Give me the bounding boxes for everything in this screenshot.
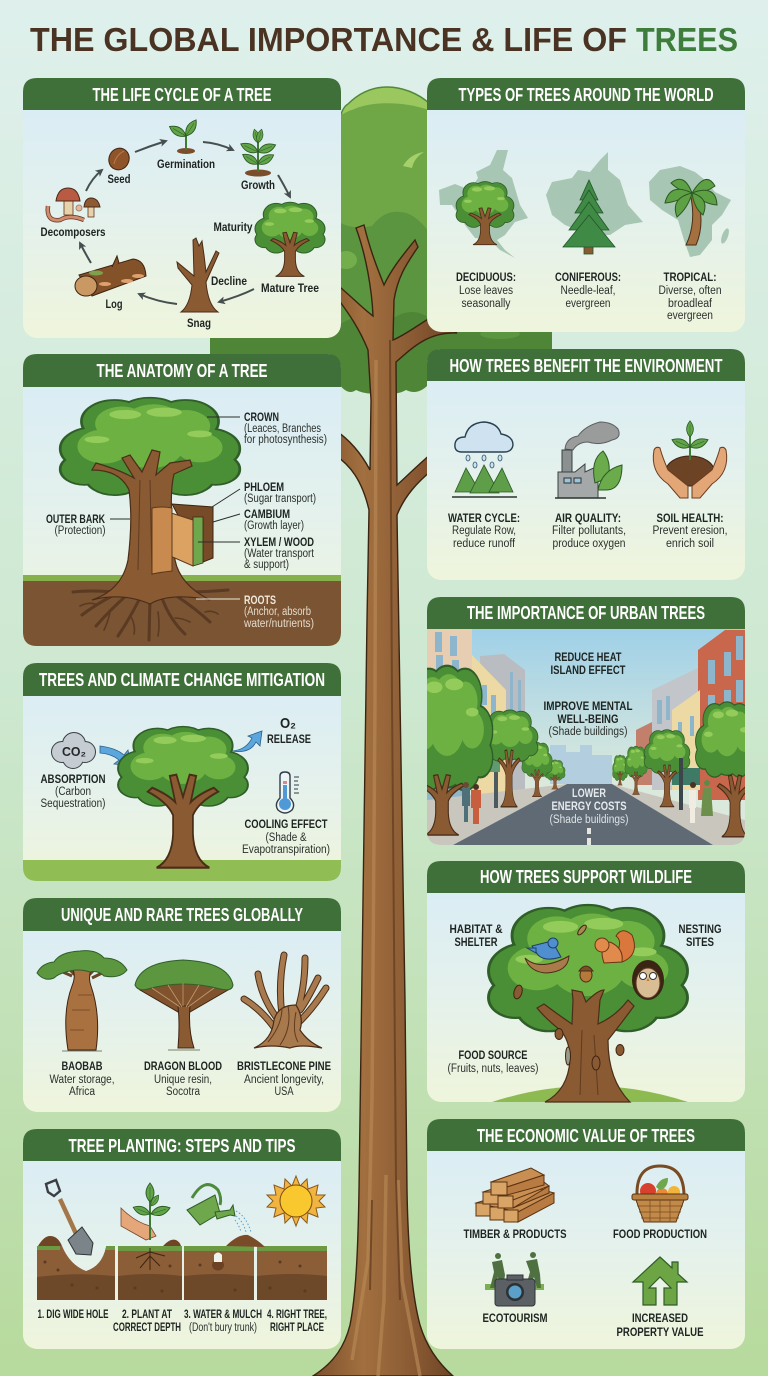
icon: mature tree — [256, 203, 324, 276]
labels: types: Needle-leaf, — [560, 285, 616, 297]
labels: anatomy: & support) — [244, 559, 289, 571]
icon: soil health — [653, 421, 727, 498]
icon: ecotourism — [485, 1252, 544, 1306]
icon: baobab — [37, 951, 127, 1051]
central tree: crown — [210, 87, 552, 394]
cycle labels: Log — [106, 299, 122, 311]
labels: urban: WELL-BEING — [558, 714, 619, 726]
icon: deciduous tree — [456, 182, 514, 245]
labels: rare trees — [50, 1061, 331, 1098]
arrows: cycle — [80, 141, 290, 304]
labels: anatomy: (Growth layer) — [244, 520, 304, 532]
labels: types: TROPICAL: — [664, 272, 716, 284]
icon: germination sprout — [168, 118, 199, 154]
labels: rare trees: Unique resin, — [154, 1074, 212, 1086]
labels: planting: 2. PLANT AT — [122, 1309, 172, 1321]
icon: dragon blood tree — [135, 960, 233, 1050]
heading: economic: THE ECONOMIC VALUE OF TREES — [477, 1126, 695, 1146]
icon: palm tree — [665, 179, 717, 245]
labels: climate: Evapotranspiration) — [242, 844, 330, 856]
insects — [512, 924, 624, 1070]
labels: types — [456, 272, 722, 322]
leader lines — [110, 417, 240, 599]
labels: urban: REDUCE HEAT — [554, 652, 622, 664]
labels: types: evergreen — [566, 298, 610, 310]
labels: environment: produce oxygen — [552, 538, 626, 550]
labels: planting: 4. RIGHT TREE, — [267, 1309, 327, 1321]
street trees — [402, 667, 758, 837]
labels: climate: (Shade & — [266, 832, 307, 844]
animals — [512, 924, 664, 1070]
hill — [492, 1086, 688, 1102]
panel: life cycle — [23, 78, 341, 338]
panel: rare trees — [23, 898, 341, 1112]
labels: types: DECIDUOUS: — [456, 272, 516, 284]
labels: anatomy: (Sugar transport) — [244, 493, 316, 505]
labels: anatomy: XYLEM / WOOD — [244, 537, 314, 549]
icon: coniferous tree — [563, 180, 615, 254]
labels: economic: PROPERTY VALUE — [616, 1327, 704, 1339]
labels: anatomy: (Leaces, Branches — [244, 423, 321, 435]
panel: anatomy — [23, 354, 341, 646]
world maps — [439, 150, 731, 258]
icon: CO2 cloud — [52, 733, 95, 768]
labels: urban: LOWER — [572, 788, 607, 800]
street scene — [427, 629, 745, 845]
cycle labels: Germination — [157, 159, 215, 171]
owl in hollow — [632, 960, 664, 1000]
icon: watering can — [187, 1185, 251, 1270]
labels: environment: Filter pollutants, — [552, 525, 626, 537]
labels: economic: TIMBER & PRODUCTS — [464, 1229, 567, 1241]
labels: rare trees: BRISTLECONE PINE — [237, 1061, 331, 1073]
labels: economic: FOOD PRODUCTION — [613, 1229, 707, 1241]
labels: climate: (Carbon — [55, 786, 91, 798]
labels: urban: ENERGY COSTS — [552, 801, 627, 813]
labels: types: Diverse, often — [658, 285, 722, 297]
labels: climate: Sequestration) — [40, 798, 106, 810]
icon: climate tree — [119, 727, 247, 868]
cycle labels: Snag — [187, 318, 211, 330]
labels: anatomy: CROWN — [244, 412, 279, 424]
labels: anatomy: (Water transport — [244, 548, 315, 560]
labels: climate: COOLING EFFECT — [244, 819, 328, 831]
icon: snag — [177, 238, 219, 312]
labels: anatomy: PHLOEM — [244, 482, 284, 494]
cycle labels: Mature Tree — [261, 283, 319, 295]
labels: environment: AIR QUALITY: — [555, 513, 621, 525]
heading: wildlife: HOW TREES SUPPORT WILDLIFE — [480, 867, 692, 887]
wildlife tree — [490, 906, 686, 1102]
labels: environment: reduce runoff — [453, 538, 516, 550]
cycle labels: Decomposers — [40, 227, 106, 239]
labels: wildlife: NESTING — [678, 924, 722, 936]
arrow: absorption — [100, 746, 131, 766]
labels: anatomy: CAMBIUM — [244, 509, 290, 521]
labels: environment: SOIL HEALTH: — [656, 513, 724, 525]
labels: anatomy: for photosynthesis) — [244, 434, 327, 446]
icon: thermometer — [276, 772, 299, 813]
panel: economic — [427, 1119, 745, 1349]
people — [462, 758, 713, 824]
icon: shovel — [46, 1180, 93, 1255]
panel: urban trees — [427, 597, 745, 845]
illustration: anatomy tree — [62, 399, 238, 640]
labels: types: broadleaf — [668, 298, 713, 310]
labels: anatomy: water/nutrients) — [243, 618, 314, 630]
heading: rare trees: UNIQUE AND RARE TREES GLOBALLY — [61, 905, 303, 925]
labels: urban: (Shade buildings) — [548, 726, 628, 738]
icon: basket — [632, 1166, 688, 1222]
icon: decomposers — [48, 188, 100, 220]
labels: anatomy — [46, 412, 327, 630]
icon: planting sprout and hand — [121, 1183, 171, 1270]
labels: planting: CORRECT DEPTH — [113, 1322, 181, 1334]
labels: economic — [464, 1229, 707, 1339]
icon: growth plant — [239, 128, 277, 176]
panel: planting — [23, 1129, 341, 1349]
labels: environment: enrich soil — [666, 538, 714, 550]
acorn — [579, 966, 593, 982]
icon: seed — [105, 145, 133, 173]
heading: climate: TREES AND CLIMATE CHANGE MITIGATION — [39, 670, 325, 690]
labels: climate — [40, 715, 330, 856]
labels: environment: Regulate Row, — [452, 525, 516, 537]
icon: sun — [267, 1176, 325, 1226]
panel: types of trees — [427, 78, 745, 332]
nest and bird — [525, 938, 569, 973]
panel: wildlife — [427, 861, 745, 1102]
icon: timber — [476, 1168, 554, 1222]
labels: rare trees: Africa — [69, 1086, 96, 1098]
labels: urban: ISLAND EFFECT — [550, 665, 626, 677]
central tree: trunk and branches — [313, 225, 457, 1376]
cycle labels: Decline — [211, 276, 247, 288]
soil panels — [37, 1235, 327, 1300]
title: TREES — [636, 21, 738, 58]
icon: water cycle — [452, 422, 517, 497]
icon: bristlecone pine — [244, 955, 326, 1048]
icon: property value house — [633, 1257, 687, 1305]
heading: planting: TREE PLANTING: STEPS AND TIPS — [68, 1136, 296, 1156]
squirrel — [595, 931, 634, 963]
labels: planting: RIGHT PLACE — [270, 1322, 324, 1334]
labels: climate: RELEASE — [267, 734, 311, 746]
cycle labels: Maturity — [214, 222, 253, 234]
labels: anatomy: (Anchor, absorb — [244, 606, 311, 618]
labels: rare trees: USA — [274, 1086, 294, 1098]
labels: wildlife: SITES — [686, 937, 714, 949]
icon: CO2 cloud: CO₂ — [62, 744, 86, 759]
labels: economic: INCREASED — [632, 1313, 688, 1325]
labels: planting: 1. DIG WIDE HOLE — [38, 1309, 109, 1321]
labels: urban: (Shade buildings) — [550, 814, 629, 826]
labels: planting — [38, 1309, 327, 1334]
labels: environment — [448, 513, 728, 550]
icon: air quality — [555, 422, 622, 498]
labels: rare trees: Water storage, — [50, 1074, 114, 1086]
labels: environment: WATER CYCLE: — [448, 513, 520, 525]
cycle labels: Growth — [241, 180, 275, 192]
panel: environment — [427, 349, 745, 580]
labels: wildlife: HABITAT & — [450, 924, 502, 936]
labels: rare trees: Ancient longevity, — [244, 1074, 324, 1086]
labels: planting: 3. WATER & MULCH — [184, 1309, 262, 1321]
labels: wildlife — [448, 924, 722, 1075]
labels: urban — [544, 652, 632, 826]
labels: climate: ABSORPTION — [40, 774, 106, 786]
labels: types: CONIFEROUS: — [555, 272, 621, 284]
labels: anatomy: (Protection) — [54, 525, 106, 537]
labels: planting: (Don't bury trunk) — [189, 1322, 257, 1334]
labels: urban: IMPROVE MENTAL — [544, 701, 632, 713]
panel: climate — [23, 663, 341, 881]
labels: rare trees: BAOBAB — [62, 1061, 102, 1073]
heading: life cycle: THE LIFE CYCLE OF A TREE — [92, 85, 272, 105]
labels: types: evergreen — [667, 310, 713, 322]
labels: economic: ECOTOURISM — [482, 1313, 548, 1325]
labels: environment: Prevent eresion, — [652, 525, 728, 537]
labels: wildlife: FOOD SOURCE — [458, 1050, 528, 1062]
labels: wildlife: SHELTER — [454, 937, 498, 949]
heading: anatomy: THE ANATOMY OF A TREE — [96, 361, 268, 381]
icon: log — [75, 256, 146, 296]
arrow: oxygen release — [232, 731, 262, 752]
labels: types: seasonally — [462, 298, 511, 310]
labels: types: Lose leaves — [459, 285, 513, 297]
labels: climate: O₂ — [280, 715, 296, 732]
labels: rare trees: DRAGON BLOOD — [144, 1061, 222, 1073]
cycle labels: Seed — [108, 174, 130, 186]
cycle labels — [40, 159, 319, 330]
labels: wildlife: (Fruits, nuts, leaves) — [448, 1063, 539, 1075]
labels: rare trees: Socotra — [166, 1086, 201, 1098]
labels: anatomy: ROOTS — [244, 595, 276, 607]
title: THE GLOBAL IMPORTANCE & LIFE OF — [30, 21, 627, 58]
labels: anatomy: OUTER BARK — [46, 514, 106, 526]
